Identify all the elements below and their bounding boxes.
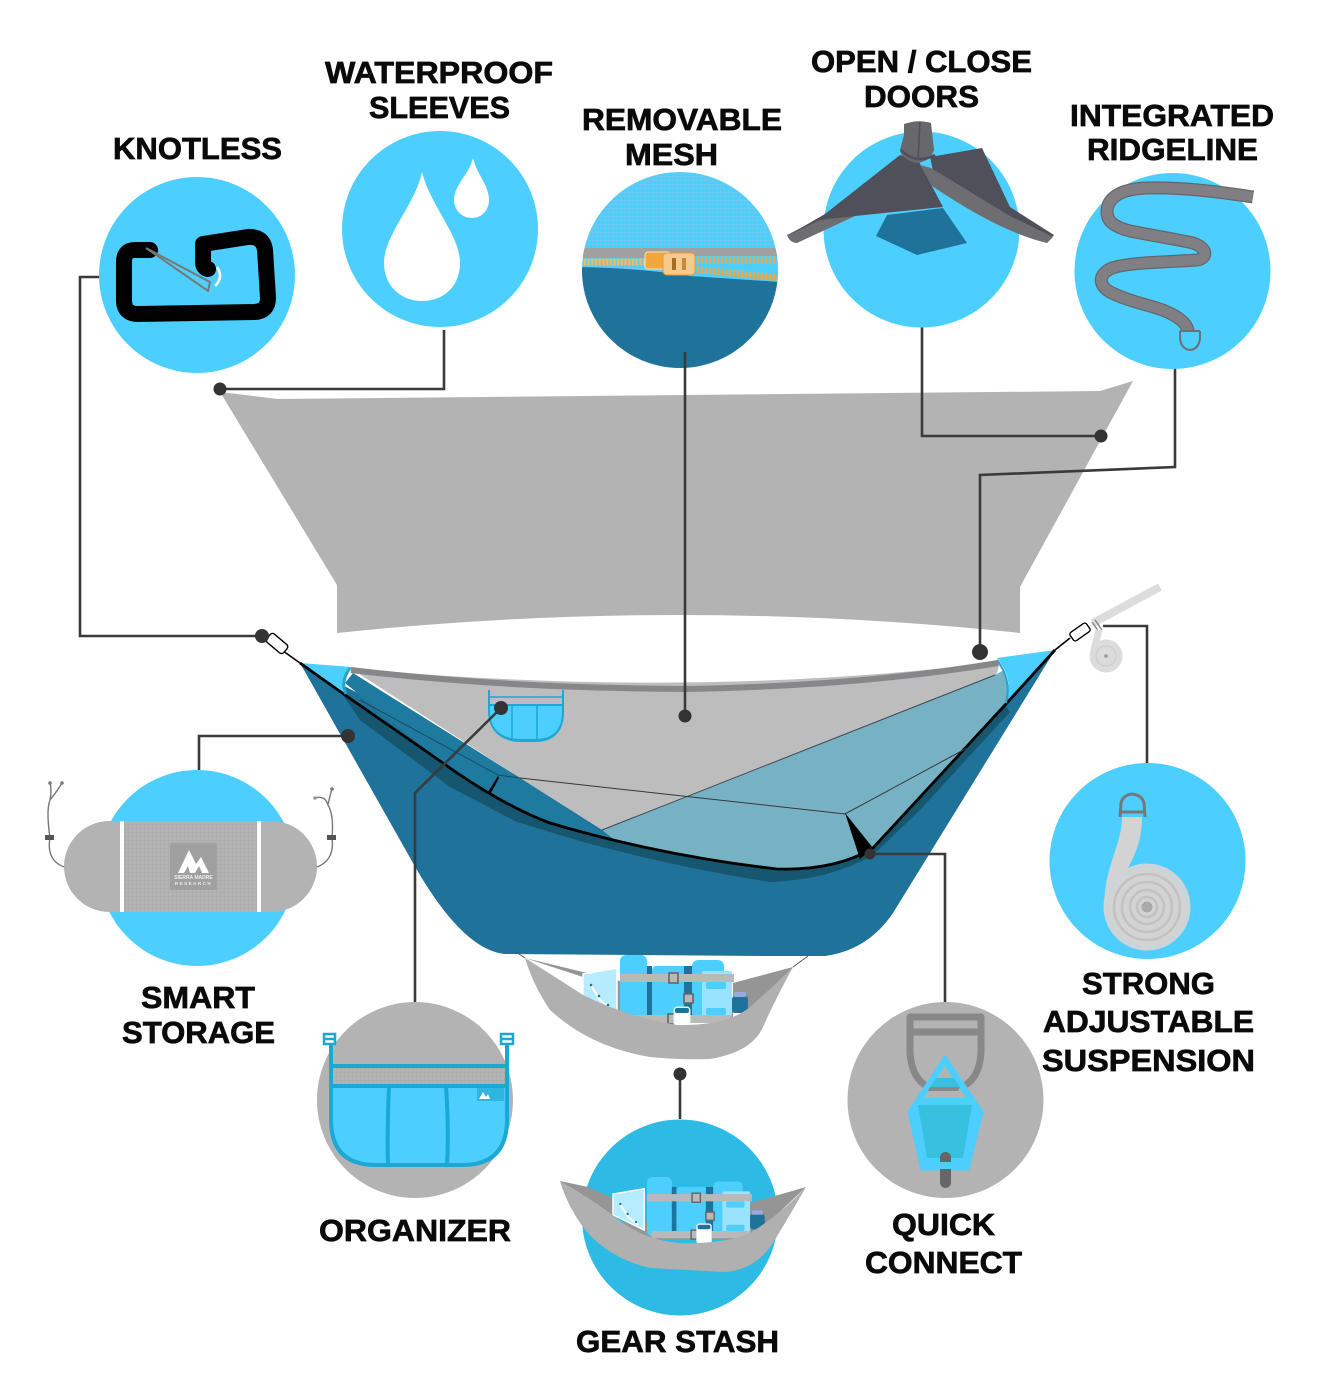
heading: quick connect: CONNECT bbox=[865, 1245, 1022, 1280]
heading: ridgeline: INTEGRATED bbox=[1070, 98, 1274, 133]
connector: knotless bbox=[80, 277, 269, 643]
connector: doors bbox=[922, 327, 1108, 442]
hammock body bbox=[300, 650, 1055, 956]
heading: smart storage bbox=[122, 980, 275, 1050]
feature: open close doors bbox=[787, 44, 1054, 328]
heading: doors: DOORS bbox=[864, 79, 979, 114]
heading: suspension: STRONG bbox=[1082, 966, 1215, 1001]
heading: smart storage: STORAGE bbox=[122, 1015, 275, 1050]
light blue door panel bbox=[602, 670, 1008, 869]
door zip seam bbox=[300, 650, 1055, 869]
feature: organizer bbox=[317, 1002, 513, 1248]
mesh panel bbox=[350, 662, 1000, 830]
feature: quick connect bbox=[848, 1002, 1044, 1280]
heading: knotless: KNOTLESS bbox=[113, 131, 282, 166]
icon: suspension roll bbox=[1050, 763, 1246, 959]
zipper pull right bbox=[845, 813, 873, 859]
connector: suspension bbox=[1103, 626, 1147, 763]
connector: removable mesh bbox=[678, 352, 692, 722]
connector: organizer bbox=[415, 701, 508, 1003]
gear stash pouch under hammock bbox=[516, 952, 808, 1059]
blue door flap bbox=[345, 673, 617, 842]
heading: waterproof sleeves: WATERPROOF bbox=[325, 55, 553, 90]
heading: removable mesh: MESH bbox=[625, 137, 718, 172]
icon: water drops bbox=[342, 131, 538, 327]
icon: carabiner bbox=[99, 177, 295, 373]
feature: gear stash bbox=[560, 1120, 806, 1359]
icon: gear stash bbox=[560, 1120, 806, 1316]
connector: gear stash bbox=[674, 1068, 686, 1119]
hammock shadow bbox=[343, 695, 1010, 882]
mini organizer pocket bbox=[489, 690, 563, 741]
heading: gear stash: GEAR STASH bbox=[576, 1324, 779, 1359]
icon: quick connect buckle bbox=[848, 1002, 1044, 1198]
feature: knotless bbox=[99, 131, 295, 373]
feature: strong adjustable suspension bbox=[1042, 763, 1255, 1078]
icon: doors bbox=[787, 121, 1054, 327]
feature: removable mesh bbox=[578, 102, 782, 370]
icon: mesh zipper bbox=[578, 170, 780, 370]
heading: removable mesh: REMOVABLE bbox=[582, 102, 782, 137]
heading: quick connect bbox=[865, 1207, 1022, 1280]
panel: rainfly tarp bbox=[220, 381, 1133, 633]
heading: suspension: ADJUSTABLE bbox=[1043, 1004, 1254, 1039]
heading: smart storage: SMART bbox=[141, 980, 255, 1015]
connector: quick connect bbox=[864, 848, 945, 1003]
right end cap bbox=[997, 650, 1055, 705]
connector: ridgeline bbox=[972, 368, 1175, 660]
connector: smart storage bbox=[199, 729, 355, 770]
heading: ridgeline bbox=[1070, 98, 1274, 167]
heading: suspension bbox=[1042, 966, 1255, 1078]
feature: integrated ridgeline bbox=[1070, 98, 1274, 369]
left suspension buckle bbox=[262, 632, 300, 663]
feature: smart storage bbox=[45, 770, 336, 1050]
icon: stuff sack: SIERRA MADRE bbox=[174, 875, 213, 881]
heading: removable mesh bbox=[582, 102, 782, 172]
right suspension strap and roll bbox=[1055, 587, 1160, 672]
connector: waterproof sleeves bbox=[214, 330, 444, 396]
icon: stuff sack: RESEARCH bbox=[175, 881, 212, 886]
left end cap bbox=[300, 663, 352, 695]
heading: waterproof sleeves: SLEEVES bbox=[369, 90, 510, 125]
structural ridgeline bbox=[351, 663, 998, 689]
icon: stuff sack bbox=[45, 770, 336, 966]
zipper pull left bbox=[488, 776, 499, 793]
heading: doors: OPEN / CLOSE bbox=[811, 44, 1032, 79]
panel: hammock bbox=[300, 650, 1055, 956]
heading: quick connect: QUICK bbox=[892, 1207, 996, 1242]
heading: organizer: ORGANIZER bbox=[319, 1213, 511, 1248]
heading: waterproof sleeves bbox=[325, 55, 553, 125]
heading: suspension: SUSPENSION bbox=[1042, 1043, 1255, 1078]
icon: ridgeline rope bbox=[1074, 173, 1270, 369]
heading: ridgeline: RIDGELINE bbox=[1087, 132, 1258, 167]
feature: waterproof sleeves bbox=[325, 55, 553, 327]
icon: organizer pocket bbox=[317, 1002, 513, 1198]
heading: doors bbox=[811, 44, 1032, 114]
